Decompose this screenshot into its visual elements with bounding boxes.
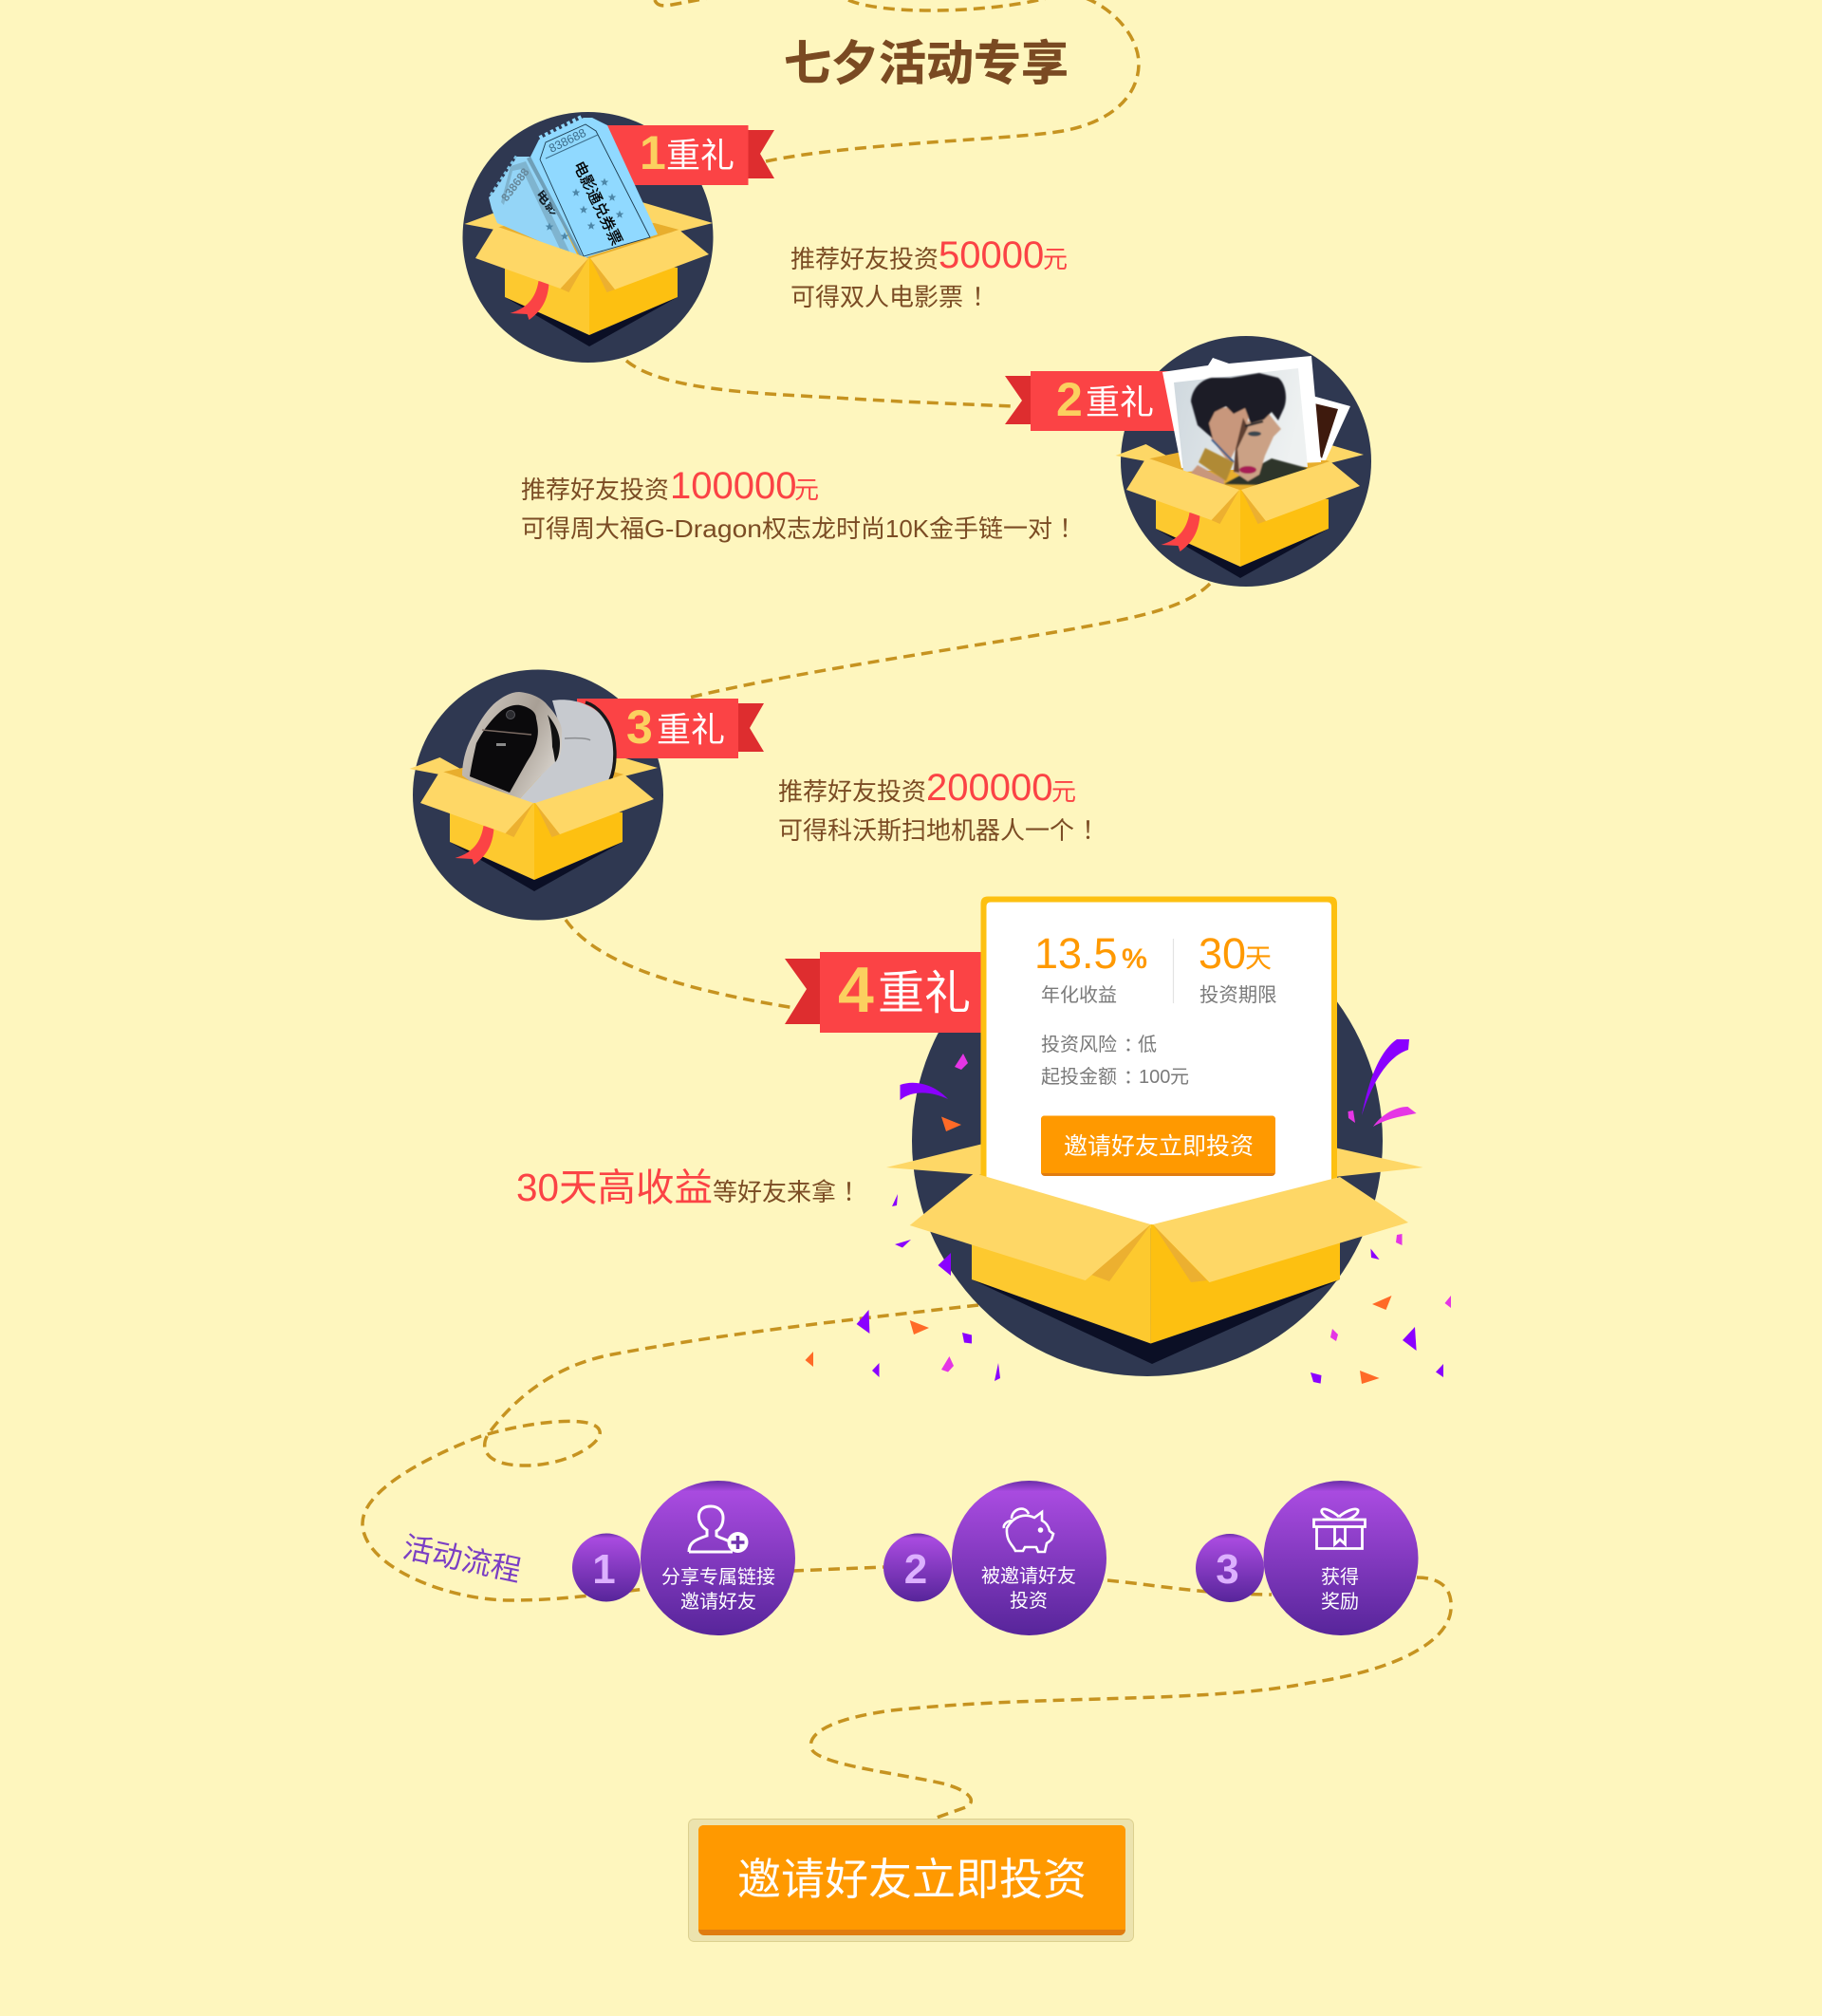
- metric labels: 年化收益: [1041, 984, 1117, 1006]
- details: 投资风险: [1041, 1034, 1117, 1055]
- box back 2: [1116, 434, 1364, 492]
- icon: back ticket: [489, 157, 579, 258]
- term: [1199, 929, 1272, 978]
- text block: gift 4: [516, 1166, 867, 1209]
- details: 起投金额: [1041, 1066, 1117, 1088]
- text block: gift 1: 推荐好友投资: [790, 245, 939, 273]
- ribbon 2: [1005, 371, 1177, 431]
- metric labels: [1041, 984, 1277, 1006]
- metric labels: 投资期限: [1199, 984, 1277, 1006]
- details: ：: [1124, 1067, 1143, 1088]
- number 3: [1196, 1534, 1264, 1602]
- icon: back ticket: 电影: [532, 186, 564, 219]
- main button: 邀请好友立即投资: [737, 1855, 1087, 1904]
- card: [981, 896, 1337, 1228]
- circle 2: [952, 1481, 1106, 1635]
- portrait: [1181, 373, 1307, 489]
- details: ：: [1124, 1035, 1143, 1055]
- yield: %: [1122, 943, 1147, 975]
- step 3 text: 获得: [1321, 1566, 1359, 1588]
- icon: piggy bank: [1004, 1509, 1053, 1552]
- text block: gift 2: ！: [1059, 514, 1084, 543]
- ribbon 1: 1: [640, 126, 666, 179]
- card button: 邀请好友立即投资: [1064, 1133, 1254, 1160]
- step 3: [1196, 1481, 1418, 1635]
- text block: gift 2: 金手链一对: [929, 514, 1052, 543]
- icon: gift: [1313, 1509, 1365, 1549]
- icon: robot vacuum: [462, 692, 615, 810]
- text block: gift 3: [778, 767, 1106, 845]
- ribbon 1: [607, 125, 774, 185]
- step 1 text: 邀请好友: [680, 1591, 756, 1613]
- text block: gift 1: 50000: [939, 234, 1044, 276]
- text block: gift 2: 可得周大福: [521, 514, 644, 543]
- number 2: [883, 1534, 952, 1602]
- text block: gift 3: 可得科沃斯扫地机器人一个: [778, 816, 1074, 845]
- circle 1: [641, 1481, 795, 1635]
- text block: gift 3: 200000: [926, 767, 1052, 809]
- title: 七夕活动专享: [784, 37, 1069, 90]
- text block: gift 1: [790, 234, 1068, 311]
- text block: gift 1: 元: [1043, 245, 1068, 273]
- panel: gift 1: [463, 112, 774, 363]
- text block: gift 1: ！: [972, 283, 996, 311]
- details: [1041, 1034, 1189, 1088]
- icon: photos: [1162, 356, 1350, 489]
- text block: gift 2: 权志龙时尚: [762, 514, 885, 543]
- icon: back ticket: 838688: [498, 165, 532, 204]
- panel: gift 3: [410, 670, 764, 921]
- ribbon 2: 2: [1056, 373, 1083, 426]
- number 1: [572, 1534, 641, 1602]
- details: 100: [1139, 1067, 1170, 1088]
- box back flaps 4: [886, 1144, 1423, 1177]
- box back 1: [465, 202, 713, 260]
- step 2 text: 被邀请好友: [981, 1565, 1076, 1587]
- box back 3: [410, 747, 658, 805]
- details: 元: [1170, 1067, 1189, 1088]
- process label: 活动流程: [400, 1530, 524, 1588]
- text block: gift 2: 100000: [670, 465, 796, 507]
- text block: gift 4: ！: [843, 1178, 867, 1206]
- ribbon 3: 3: [626, 700, 653, 754]
- dashed path: [363, 0, 1451, 1818]
- ribbon 4: 4: [838, 954, 874, 1026]
- icon: front ticket: 电影通兑券票: [569, 159, 625, 248]
- number 3: 3: [1216, 1546, 1239, 1593]
- step 1 text: 分享专属链接: [661, 1566, 775, 1588]
- step 3 text: 奖励: [1321, 1591, 1359, 1613]
- ribbon 2: 重礼: [1086, 383, 1154, 421]
- number 2: 2: [904, 1546, 927, 1593]
- circle 3: [1264, 1481, 1418, 1635]
- card button: [1041, 1116, 1275, 1176]
- box front 1: [475, 226, 709, 346]
- text block: gift 2: [521, 465, 1084, 543]
- panel: gift 2: [1005, 336, 1371, 587]
- icon: front ticket: [527, 117, 658, 258]
- text block: gift 4: 30天高收益: [516, 1166, 713, 1209]
- ribbon 3: 重礼: [657, 710, 725, 749]
- term: 天: [1245, 943, 1272, 973]
- step 2: [883, 1481, 1106, 1635]
- text block: gift 4: 等好友来拿: [713, 1178, 836, 1206]
- text block: gift 2: G-Dragon: [644, 514, 762, 543]
- term: 30: [1199, 929, 1246, 978]
- circle 2: [1121, 336, 1371, 587]
- yield: 13.5: [1034, 929, 1118, 978]
- circle 3: [413, 670, 663, 921]
- text block: gift 2: 10K: [885, 514, 930, 543]
- icon: user plus: [689, 1506, 748, 1553]
- box front 3: [420, 771, 654, 891]
- box 4: [910, 1173, 1408, 1364]
- circle 4: [912, 905, 1383, 1376]
- main button: [689, 1819, 1133, 1942]
- details: 低: [1138, 1034, 1157, 1055]
- ribbon 4: 重礼: [878, 968, 971, 1019]
- text block: gift 2: 元: [794, 476, 819, 504]
- text block: gift 3: 推荐好友投资: [778, 777, 926, 806]
- text block: gift 1: 可得双人电影票: [790, 283, 963, 311]
- circle 1: [463, 112, 714, 363]
- number 1: 1: [592, 1546, 616, 1593]
- step 1: [572, 1481, 795, 1635]
- text block: gift 3: ！: [1082, 816, 1106, 845]
- step 2 text: 投资: [1010, 1590, 1048, 1612]
- ribbon 1: 重礼: [666, 136, 734, 175]
- ribbon 4: [785, 952, 983, 1033]
- confetti: [805, 1039, 1451, 1384]
- box front 2: [1126, 457, 1360, 578]
- text block: gift 3: 元: [1051, 777, 1076, 806]
- ribbon 3: [577, 699, 764, 758]
- icon: front ticket: 838688: [547, 126, 588, 156]
- text block: gift 2: 推荐好友投资: [521, 476, 669, 504]
- panel: gift 4: [785, 896, 1423, 1376]
